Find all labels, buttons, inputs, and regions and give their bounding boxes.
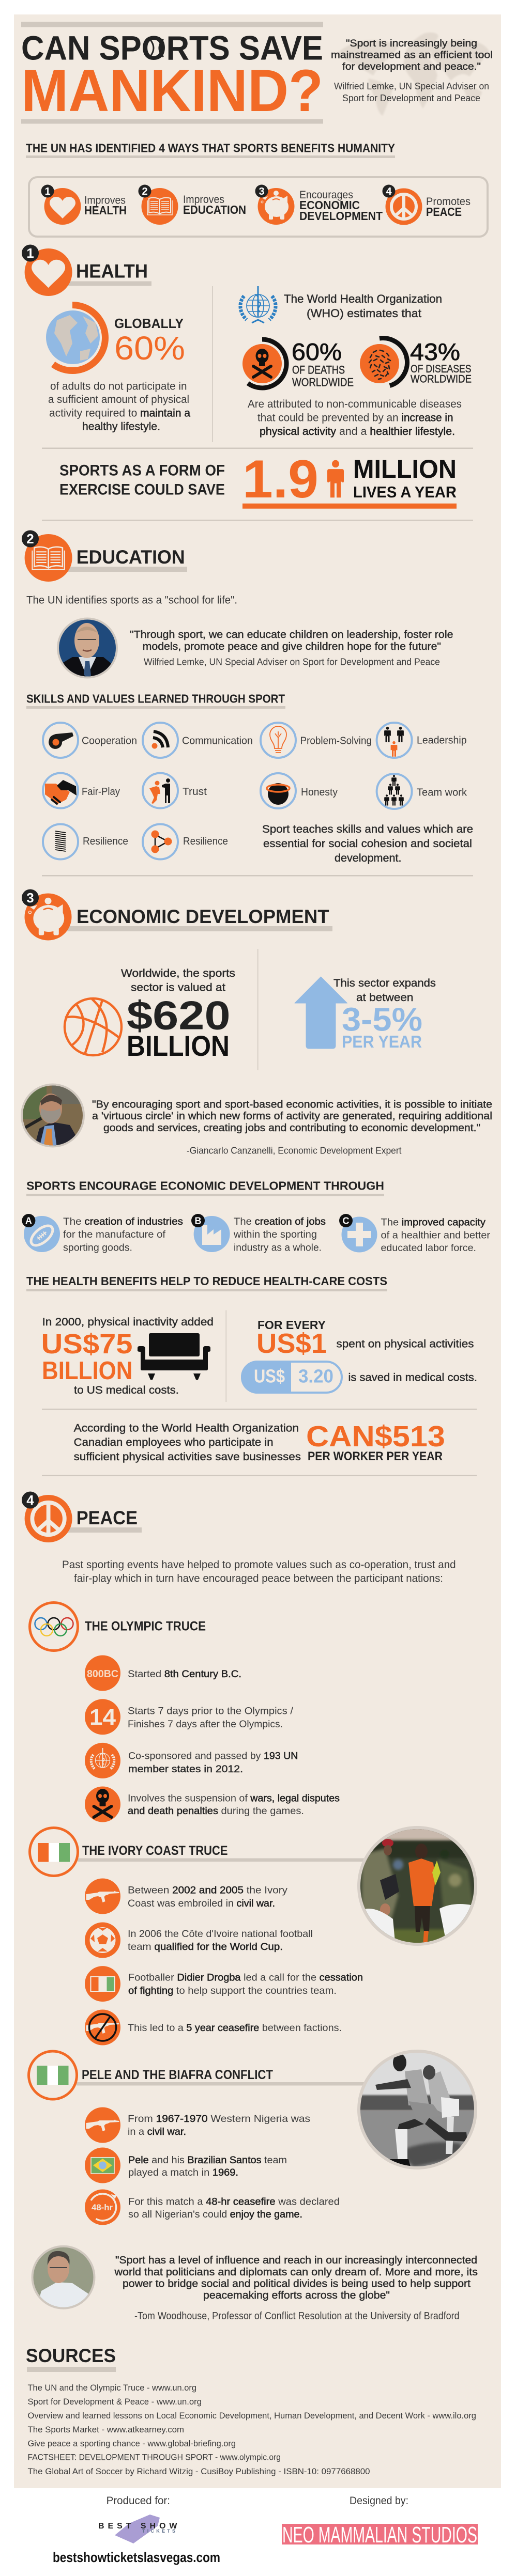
icon: brazil flag <box>91 2158 114 2174</box>
ivory item: world cup: team qualified for the World Cup. <box>128 1942 283 1953</box>
credit: designed by: Designed by: <box>350 2495 408 2507</box>
icon: sofa <box>138 1333 210 1380</box>
sources list: The UN and the Olympic Truce - www.un.org <box>28 2383 196 2393</box>
header <box>21 22 493 124</box>
olympic item: 8th century <box>85 1655 241 1691</box>
stat: CAN$513: According to the World Health Organization <box>74 1422 299 1434</box>
stat: 1.9 million lives <box>59 449 457 509</box>
sources list: The Sports Market - www.atkearney.com <box>28 2425 184 2434</box>
stat: globally 60%: healthy lifestyle. <box>82 421 160 433</box>
benefit 1 health: 1 <box>44 186 51 197</box>
pele item: Santos match <box>85 2148 287 2183</box>
sources list <box>28 2383 476 2476</box>
section header: education: EDUCATION <box>77 547 185 568</box>
benefit 3 economic development: DEVELOPMENT <box>299 209 383 223</box>
photo: Giancarlo Canzanelli <box>21 1083 85 1148</box>
benefit 3 economic development: ECONOMIC <box>299 198 360 212</box>
benefit 3 economic development: Encourages <box>299 189 353 201</box>
ivory item: world cup <box>85 1923 313 1958</box>
section header: health: 1 <box>26 245 34 261</box>
quote: Canzanelli: a 'virtuous circle' in which new forms of activity are generated, requiring additional <box>92 1111 492 1122</box>
olympic item: 8th century: 800BC <box>87 1668 118 1680</box>
section header: economic development: ECONOMIC DEVELOPMENT <box>77 906 329 927</box>
ivory coast heading: THE IVORY COAST TRUCE <box>82 1844 227 1858</box>
section header: peace: 4 <box>26 1492 34 1508</box>
icon: factory <box>202 1225 221 1245</box>
skill: trust: Trust <box>183 786 207 798</box>
skill: cooperation <box>49 732 137 749</box>
skill: resilience network <box>151 831 228 853</box>
panel: four benefits <box>29 177 488 237</box>
stat: globally 60%: a sufficient amount of physical <box>48 394 189 405</box>
bar top <box>21 22 323 27</box>
pele item: Santos match: Pele and his Brazilian Santos team <box>128 2155 287 2166</box>
heading: health benefits: THE HEALTH BENEFITS HELP TO REDUCE HEALTH-CARE COSTS <box>26 1274 387 1288</box>
quote: Wilfried Lemke, UN Special Adviser on <box>334 81 489 91</box>
skill: resilience spring: Resilience <box>83 836 128 847</box>
olympic item: 193 UN member states: member states in 2012. <box>128 1764 243 1775</box>
stat: globally 60%: of adults do not participate in <box>50 380 187 392</box>
icon: tennis ball <box>150 39 163 57</box>
quote: Canzanelli: "By encouraging sport and sport-based economic activities, it is possible to initiate <box>92 1099 492 1111</box>
sources list: FACTSHEET: DEVELOPMENT THROUGH SPORT - www.olympic.org <box>28 2453 281 2462</box>
stat: US$75 billion <box>41 1316 214 1396</box>
skill: honesty: Honesty <box>301 787 338 798</box>
pele item: civil war: in a civil war. <box>128 2127 186 2137</box>
pele heading: PELE AND THE BIAFRA CONFLICT <box>82 2068 273 2082</box>
benefit 1 health: HEALTH <box>84 204 127 217</box>
ivory item: ceasefire <box>85 2009 342 2046</box>
stat: 3-5% per year: This sector expands <box>333 977 436 989</box>
text: past sporting events <box>62 1559 456 1585</box>
benefit 2 education: Improves <box>183 194 224 206</box>
stat: US$1 saves US$3.20: is saved in medical costs. <box>348 1372 477 1384</box>
bar bottom <box>21 119 323 124</box>
quote: Woodhouse: peacemaking efforts across the globe" <box>203 2290 390 2301</box>
stat: $620 billion <box>65 967 235 1062</box>
section header: peace <box>22 1492 142 1542</box>
item B: jobs: The creation of jobs <box>234 1216 326 1227</box>
title line 1: CAN SPORTS SAVE <box>21 29 323 67</box>
skill: cooperation: Cooperation <box>82 736 137 747</box>
item C: capacity: C <box>342 1216 350 1226</box>
text: skills summary: development. <box>335 852 401 864</box>
quote: Sport for Development and Peace <box>342 93 480 103</box>
item A: industries: The creation of industries <box>63 1216 183 1227</box>
skill: communication <box>152 731 253 749</box>
item A: industries <box>22 1214 183 1253</box>
olympic item: suspension of wars: Involves the suspension of wars, legal disputes <box>128 1793 340 1804</box>
stat: US$1 saves US$3.20: US$1 <box>256 1328 327 1359</box>
photo: Pele in action <box>357 2050 478 2169</box>
icon: football <box>27 1222 56 1249</box>
skill: fair play: Fair-Play <box>82 786 120 798</box>
olympic item: 14 days <box>85 1699 294 1735</box>
photo: Wilfried Lemke <box>57 617 118 679</box>
icon: olympic rings <box>35 1618 73 1636</box>
ivory coast heading <box>30 1828 365 1876</box>
item C: capacity: The improved capacity <box>381 1217 486 1228</box>
skill: resilience spring <box>55 831 128 851</box>
benefit 2 education: 2 <box>142 186 148 197</box>
stat: globally 60%: 60% <box>114 330 185 367</box>
quote: Woodhouse: "Sport has a level of influence and reach in our increasingly interconnected <box>115 2255 477 2266</box>
skill: team work <box>384 775 467 806</box>
quote: Canzanelli: -Giancarlo Canzanelli, Economic Development Expert <box>187 1146 401 1156</box>
stat: CAN$513: CAN$513 <box>306 1420 445 1453</box>
sources list: Overview and learned lessons on Local Economic Development, Human Development, and Decent Work - www.ilo.org <box>28 2411 476 2421</box>
stat: CAN$513: Canadian employees who participate in <box>74 1437 274 1448</box>
logo: best show tickets: TICKETS <box>142 2528 175 2534</box>
text: past sporting events: Past sporting events have helped to promote values such as co-operation, trust and <box>62 1559 456 1571</box>
quote: Woodhouse: power to bridge social and political divides is being used to help support <box>123 2278 471 2289</box>
skill: fair play <box>45 780 120 804</box>
stat: 60% of deaths: 60% <box>292 338 342 365</box>
skill: problem solving: Problem-Solving <box>300 736 372 747</box>
quote: Canzanelli: goods and services, creating jobs and contributing to economic development." <box>103 1122 480 1134</box>
skill: leadership <box>384 727 467 757</box>
stat: 1.9 million lives: 1.9 <box>242 449 318 509</box>
icon: flag <box>90 1976 115 1992</box>
section header: economic development: 3 <box>26 890 34 905</box>
credit: produced for: Produced for: <box>107 2495 170 2507</box>
stat: US$1 saves US$3.20 <box>241 1318 477 1394</box>
stat: 1.9 million lives: EXERCISE COULD SAVE <box>59 481 225 498</box>
text: skills summary <box>262 823 473 864</box>
photo: Tom Woodhouse <box>31 2245 96 2309</box>
WHO block: Are attributed to non-communicable diseases <box>248 398 462 410</box>
item A: industries: sporting goods. <box>63 1243 132 1253</box>
stat: 43% of diseases <box>360 338 472 386</box>
skills grid <box>43 723 467 860</box>
text: skills summary: Sport teaches skills and values which are <box>262 823 473 835</box>
credit: designed by <box>282 2495 478 2548</box>
benefit 4 peace: 4 <box>386 186 392 197</box>
olympic item: suspension of wars <box>85 1786 340 1822</box>
olympic truce heading <box>30 1602 206 1651</box>
pele item: 48-hr ceasefire: For this match a 48-hr ceasefire was declared <box>128 2196 340 2207</box>
stat: 1.9 million lives: MILLION <box>353 455 457 483</box>
WHO block: physical activity and a healthier lifestyle. <box>260 426 455 438</box>
quote <box>331 38 493 103</box>
skill: leadership: Leadership <box>417 735 467 746</box>
stat: $620 billion: Worldwide, the sports <box>121 967 235 979</box>
pele item: civil war <box>85 2107 310 2143</box>
skill: communication: Communication <box>182 736 253 747</box>
quote: Woodhouse: -Tom Woodhouse, Professor of Conflict Resolution at the University of Bradford <box>134 2310 460 2322</box>
item B: jobs <box>191 1214 326 1253</box>
icon: globe <box>46 310 100 364</box>
item A: industries: for the manufacture of <box>63 1229 166 1240</box>
text: past sporting events: fair-play which in turn have encouraged peace between the participant nations: <box>74 1572 443 1585</box>
stat: CAN$513: PER WORKER PER YEAR <box>308 1449 443 1463</box>
stat: 60% of deaths <box>242 338 354 388</box>
section header: peace: PEACE <box>77 1507 138 1528</box>
pill: US$ 3.20: 3.20 <box>298 1366 333 1386</box>
stat: US$75 billion: US$75 <box>41 1329 132 1360</box>
item B: jobs: within the sporting <box>233 1229 317 1240</box>
olympic item: suspension of wars: and death penalties during the games. <box>128 1806 304 1817</box>
sources list: The Global Art of Soccer by Richard Witzig - CusiBoy Publishing - ISBN-10: 0977668800 <box>28 2466 370 2476</box>
benefit 2 education: EDUCATION <box>183 203 246 216</box>
ivory item: civil war: Coast was embroiled in civil war. <box>128 1898 275 1909</box>
logo: best show tickets: BEST SHOW <box>98 2522 177 2531</box>
olympic item: 14 days: Finishes 7 days after the Olympics. <box>128 1719 283 1730</box>
benefit 4 peace: Promotes <box>426 196 471 208</box>
section header: economic development <box>22 889 332 940</box>
benefit 1 health <box>41 185 127 225</box>
stat: 43% of diseases: 43% <box>410 338 460 365</box>
skill: team work: Team work <box>417 787 467 799</box>
ivory item: Didier Drogba: Footballer Didier Drogba led a call for the cessation <box>128 1973 363 1984</box>
stat: CAN$513: sufficient physical activities save businesses <box>74 1451 301 1463</box>
logo: best show tickets <box>98 2515 177 2543</box>
benefit 3 economic development <box>255 185 383 225</box>
stat: 3-5% per year: 3-5% <box>342 1001 422 1038</box>
icon: WHO emblem <box>240 286 276 323</box>
ivory item: civil war <box>85 1878 288 1914</box>
stat: US$75 billion: BILLION <box>42 1357 132 1385</box>
photo: ivory coast celebration <box>357 1826 478 1947</box>
stat: globally 60%: activity required to maintain a <box>49 408 190 419</box>
ivory item: civil war: Between 2002 and 2005 the Ivory <box>128 1885 288 1896</box>
stat: 3-5% per year: at between <box>356 992 414 1004</box>
benefit 3 economic development: 3 <box>259 186 265 197</box>
olympic item: 193 UN member states <box>85 1743 298 1778</box>
stat: US$1 saves US$3.20: FOR EVERY <box>257 1318 326 1332</box>
icon: nigeria flag <box>37 2066 68 2085</box>
WHO block: that could be prevented by an increase in <box>257 412 453 424</box>
pele item: 48-hr ceasefire: 48-hr <box>92 2203 113 2212</box>
quote: Lemke <box>130 629 453 667</box>
item C: capacity: of a healthier and better <box>381 1230 491 1241</box>
title line 2: MANKIND? <box>21 58 323 124</box>
stat: 60% of deaths: OF DEATHS <box>292 364 345 377</box>
icon: person <box>327 460 344 497</box>
olympic item: 193 UN member states: Co-sponsored and passed by 193 UN <box>128 1751 298 1762</box>
credit: produced for: bestshowticketslasvegas.com <box>53 2550 220 2565</box>
section header: education <box>22 530 187 582</box>
icon: soccer ball <box>90 1927 116 1953</box>
olympic item: 8th century: Started 8th Century B.C. <box>128 1669 241 1680</box>
skill: problem solving <box>270 726 372 753</box>
heading: four ways: THE UN HAS IDENTIFIED 4 WAYS THAT SPORTS BENEFITS HUMANITY <box>26 142 395 155</box>
item B: jobs: B <box>194 1216 202 1226</box>
benefit 4 peace: PEACE <box>426 205 462 218</box>
WHO block <box>240 286 472 438</box>
text: school for life: The UN identifies sports as a "school for life". <box>26 594 237 606</box>
stat: 43% of diseases: WORLDWIDE <box>411 373 472 385</box>
sources list: Give peace a sporting chance - www.global-briefing.org <box>28 2439 236 2448</box>
stat: US$1 saves US$3.20: spent on physical activities <box>336 1338 474 1350</box>
olympic item: 14 days: Starts 7 days prior to the Olympics / <box>128 1706 294 1717</box>
benefit 2 education <box>139 185 246 225</box>
credit: produced for <box>53 2495 220 2565</box>
quote: Woodhouse: world that politicians and diplomats can only dream of. More and more, its <box>114 2267 478 2278</box>
WHO block: (WHO) estimates that <box>307 307 421 320</box>
section header: education: 2 <box>26 531 34 547</box>
heading: sports encourage: SPORTS ENCOURAGE ECONOMIC DEVELOPMENT THROUGH <box>26 1179 384 1193</box>
icon: basketball <box>65 998 122 1055</box>
skill: trust <box>149 778 207 804</box>
stat: $620 billion: $620 <box>127 993 231 1038</box>
heading: skills: SKILLS AND VALUES LEARNED THROUGH SPORT <box>26 692 285 706</box>
pele heading <box>29 2051 365 2099</box>
benefit 4 peace <box>383 185 471 225</box>
stat: globally 60% <box>46 305 190 433</box>
pill: US$ 3.20 <box>241 1361 342 1394</box>
pele item: 48-hr ceasefire <box>84 2189 340 2226</box>
stat: 3-5% per year <box>295 977 436 1051</box>
quote: Lemke: "Through sport, we can educate children on leadership, foster role <box>130 629 453 641</box>
sources list: Sport for Development & Peace - www.un.org <box>28 2397 202 2407</box>
quote: for development and peace." <box>342 61 481 72</box>
icon: ivory coast flag <box>38 1843 70 1862</box>
item C: capacity: educated labor force. <box>381 1243 476 1254</box>
decorative world map <box>337 33 489 116</box>
quote: "Sport is increasingly being <box>346 38 477 49</box>
benefit 1 health: Improves <box>84 195 126 207</box>
pill: US$ 3.20: US$ <box>254 1366 285 1386</box>
stat: 1.9 million lives: LIVES A YEAR <box>353 483 457 501</box>
ivory item: Didier Drogba: of fighting to help support the countries team. <box>128 1986 337 1996</box>
stat: 3-5% per year: PER YEAR <box>342 1032 422 1051</box>
quote: Canzanelli <box>92 1099 492 1156</box>
stat: 43% of diseases: OF DISEASES <box>411 363 472 375</box>
olympic truce heading: THE OLYMPIC TRUCE <box>85 1619 206 1633</box>
sources heading: SOURCES <box>26 2345 116 2366</box>
section header: health <box>22 245 151 296</box>
section header: health: HEALTH <box>76 261 148 282</box>
stat: globally 60%: GLOBALLY <box>114 316 184 331</box>
stat: $620 billion: sector is valued at <box>131 981 225 994</box>
olympic item: 14 days: 14 <box>89 1705 116 1730</box>
pele item: Santos match: played a match in 1969. <box>128 2167 238 2178</box>
stat: CAN$513 <box>74 1420 445 1463</box>
ivory item: Didier Drogba <box>85 1966 363 2002</box>
stat: $620 billion: BILLION <box>127 1029 230 1062</box>
icon: plus <box>347 1223 371 1246</box>
item C: capacity <box>339 1214 491 1254</box>
stat: 60% of deaths: WORLDWIDE <box>292 376 354 388</box>
stat: US$75 billion: In 2000, physical inactivity added <box>42 1316 214 1328</box>
ivory item: world cup: In 2006 the Côte d'Ivoire national football <box>128 1929 313 1940</box>
quote: Woodhouse <box>114 2255 478 2322</box>
icon: up arrow <box>295 977 347 1049</box>
ivory item: ceasefire: This led to a 5 year ceasefire between factions. <box>128 2023 342 2034</box>
item A: industries: A <box>25 1216 32 1226</box>
text: skills summary: essential for social cohesion and societal <box>263 838 472 850</box>
quote: Lemke: Wilfried Lemke, UN Special Adviser on Sport for Development and Peace <box>144 657 440 667</box>
pele item: civil war: From 1967-1970 Western Nigeria was <box>128 2114 310 2125</box>
WHO block: The World Health Organization <box>284 292 442 305</box>
pele item: 48-hr ceasefire: so all Nigerian's could enjoy the game. <box>128 2209 302 2220</box>
stat: 1.9 million lives: SPORTS AS A FORM OF <box>59 462 225 479</box>
quote: mainstreamed as an efficient tool <box>331 50 493 61</box>
skill: resilience network: Resilience <box>183 836 228 847</box>
skill: honesty <box>267 783 338 805</box>
quote: Lemke: models, promote peace and give children hope for the future" <box>143 641 441 652</box>
column divider <box>212 286 213 442</box>
item B: jobs: industry as a whole. <box>234 1243 322 1253</box>
stat: US$75 billion: to US medical costs. <box>74 1384 179 1396</box>
